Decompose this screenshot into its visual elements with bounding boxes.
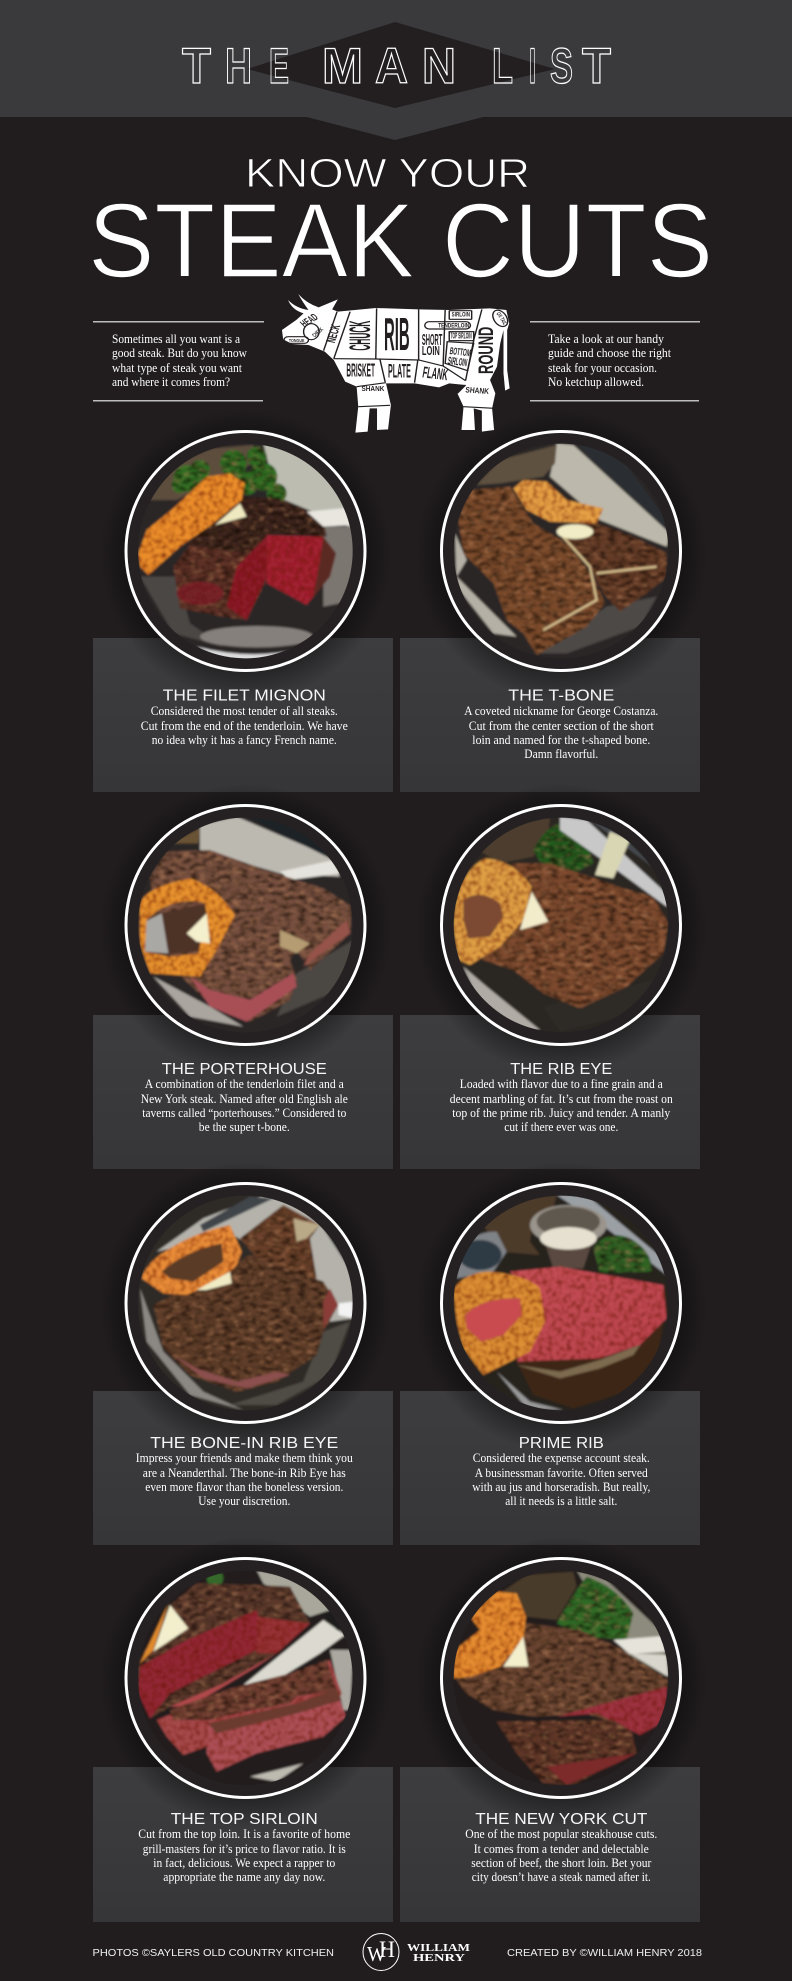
intro text left: and where it comes from? [112,375,230,389]
cow cut labels: TENDERLOIN [438,323,469,329]
text: top sirloin [138,1811,351,1884]
title: the man list: A [375,38,408,94]
text: filet mignon [141,688,348,747]
text: rib eye: top of the prime rib. Juicy and tender. A manly [452,1106,671,1120]
title: the man list: S [550,38,573,94]
text: bone-in rib eye: THE BONE-IN RIB EYE [150,1435,338,1452]
text: prime rib [472,1435,650,1508]
cow cut labels: BOTTOM [449,346,472,359]
text: bone-in rib eye: even more flavor than the boneless version. [145,1480,343,1494]
text: new york cut: THE NEW YORK CUT [475,1811,648,1828]
panel background: prime rib [400,1391,700,1545]
panel background: porterhouse [93,1015,393,1169]
logo: william henry: WILLIAM [407,1942,471,1954]
photo: top sirloin [126,1558,365,1798]
text: prime rib: A businessman favorite. Often served [475,1466,648,1480]
footer credit: photos: PHOTOS ©SAYLERS OLD COUNTRY KITCHEN [92,1948,334,1959]
text: filet mignon: Cut from the end of the tenderloin. We have [141,719,348,733]
title: the man list [182,38,611,94]
text: new york cut [465,1811,657,1884]
intro text right [530,321,700,402]
panel background: filet mignon [93,638,393,792]
text: t-bone [464,688,658,761]
text: bone-in rib eye [136,1435,353,1508]
text: prime rib: all it needs is a little salt. [505,1494,617,1508]
text: bone-in rib eye: Use your discretion. [198,1494,290,1508]
text: bone-in rib eye: are a Neanderthal. The bone-in Rib Eye has [143,1466,346,1480]
intro text right: Take a look at our handy [548,332,665,346]
text: rib eye [450,1061,673,1134]
text: new york cut: city doesn’t have a steak named after it. [472,1870,651,1884]
text: t-bone: loin and named for the t-shaped bone. [472,733,650,747]
title: the man list: E [269,38,289,94]
cow cut labels: TOP SIRLOIN [450,332,472,340]
cow cut labels: HEAD [298,312,321,330]
photo: bone-in rib eye [126,1184,365,1422]
text: t-bone: A coveted nickname for George Costanza. [464,704,658,718]
photo: filet mignon [126,432,365,670]
logo: william henry: W [367,1942,386,1966]
cow cut labels: RIB [384,308,410,360]
panel background: new york cut [400,1767,700,1922]
text: prime rib: with au jus and horseradish. But really, [472,1480,650,1494]
text: rib eye: cut if there ever was one. [504,1120,618,1134]
photo: t-bone [442,432,680,670]
intro text right: steak for your occasion. [548,361,657,375]
logo: william henry: H [379,1937,395,1962]
text: new york cut: section of beef, the short loin. Bet your [471,1856,652,1870]
intro text left: what type of steak you want [112,361,242,375]
text: top sirloin: grill-masters for it’s price to flavor ratio. It is [143,1842,346,1856]
panel background: bone-in rib eye [93,1391,393,1545]
panel background: top sirloin [93,1767,393,1922]
text: porterhouse [141,1061,348,1134]
intro text right: guide and choose the right [548,346,671,360]
text: porterhouse: A combination of the tenderloin filet and a [145,1077,344,1091]
cow cut labels: SHANK [362,385,384,393]
cow cut labels: SHANK [465,385,490,396]
logo: william henry [363,1934,471,1970]
text: top sirloin: THE TOP SIRLOIN [171,1811,318,1828]
intro text left [93,321,264,402]
cow cut labels: SIRLOIN [447,354,468,369]
title: the man list: N [422,38,456,94]
cow cut labels [289,308,508,396]
footer credit: created by: CREATED BY ©WILLIAM HENRY 2018 [507,1948,702,1959]
photo: prime rib [442,1184,680,1422]
cow cut labels: SHORT [422,331,442,349]
cow cut labels: BRISKET [346,361,375,381]
text: filet mignon: THE FILET MIGNON [163,688,326,704]
text: t-bone: THE T-BONE [508,688,614,704]
text: bone-in rib eye: Impress your friends and make them think you [136,1451,353,1465]
cow cut labels: LOIN [422,344,440,359]
cow cut labels: SIRLOIN [452,310,470,318]
title: the man list: M [322,38,363,94]
cow cut labels: NECK [323,323,344,344]
cow cut labels: TONGUE [289,338,305,344]
intro text left: Sometimes all you want is a [112,332,240,346]
text: porterhouse: New York steak. Named after old English ale [141,1092,348,1106]
cow cut labels: ROUND [474,327,498,374]
title: the man list: H [225,38,252,94]
text: porterhouse: taverns called “porterhouses.” Considered to [142,1106,346,1120]
logo: william henry: HENRY [413,1952,465,1964]
intro text left: good steak. But do you know [112,346,247,360]
title: the man list: T [182,38,211,94]
cow cut labels: OX TAIL [494,312,508,326]
intro text right: No ketchup allowed. [548,375,644,389]
text: filet mignon: Considered the most tender of all steaks. [151,704,338,718]
cow cut labels: CHEEK [312,327,326,339]
cow butcher diagram: CHUCK [344,320,377,351]
text: new york cut: One of the most popular steakhouse cuts. [465,1827,657,1841]
text: top sirloin: appropriate the name any day now. [163,1870,325,1884]
title: the man list: T [582,38,611,94]
panel background: t-bone [400,638,700,792]
text: new york cut: It comes from a tender and delectable [474,1842,649,1856]
text: porterhouse: be the super t-bone. [199,1120,290,1134]
text: filet mignon: no idea why it has a fancy French name. [152,733,337,747]
text: porterhouse: THE PORTERHOUSE [162,1061,327,1078]
title: the man list: L [492,38,513,94]
text: t-bone: Cut from the center section of the short [469,719,654,733]
text: t-bone: Damn flavorful. [524,747,598,761]
panel background: rib eye [400,1015,700,1169]
photo: porterhouse [126,806,365,1044]
cow cut labels: PLATE [388,360,411,382]
text: top sirloin: Cut from the top loin. It is a favorite of home [138,1827,351,1841]
heading: know your: KNOW YOUR [245,150,530,196]
title: the man list: I [529,38,536,94]
photo: new york cut [442,1558,680,1798]
cow butcher diagram [282,294,511,433]
text: rib eye: decent marbling of fat. It’s cut from the roast on [450,1092,673,1106]
text: rib eye: THE RIB EYE [510,1061,612,1078]
heading: steak cuts: STEAK CUTS [88,182,713,300]
photo: rib eye [442,806,680,1044]
text: top sirloin: in fact, delicious. We expect a rapper to [153,1856,335,1870]
text: rib eye: Loaded with flavor due to a fine grain and a [460,1077,663,1091]
header band [0,0,792,140]
cow cut labels: FLANK [421,363,449,384]
text: prime rib: PRIME RIB [519,1435,604,1452]
text: prime rib: Considered the expense account steak. [473,1451,650,1465]
